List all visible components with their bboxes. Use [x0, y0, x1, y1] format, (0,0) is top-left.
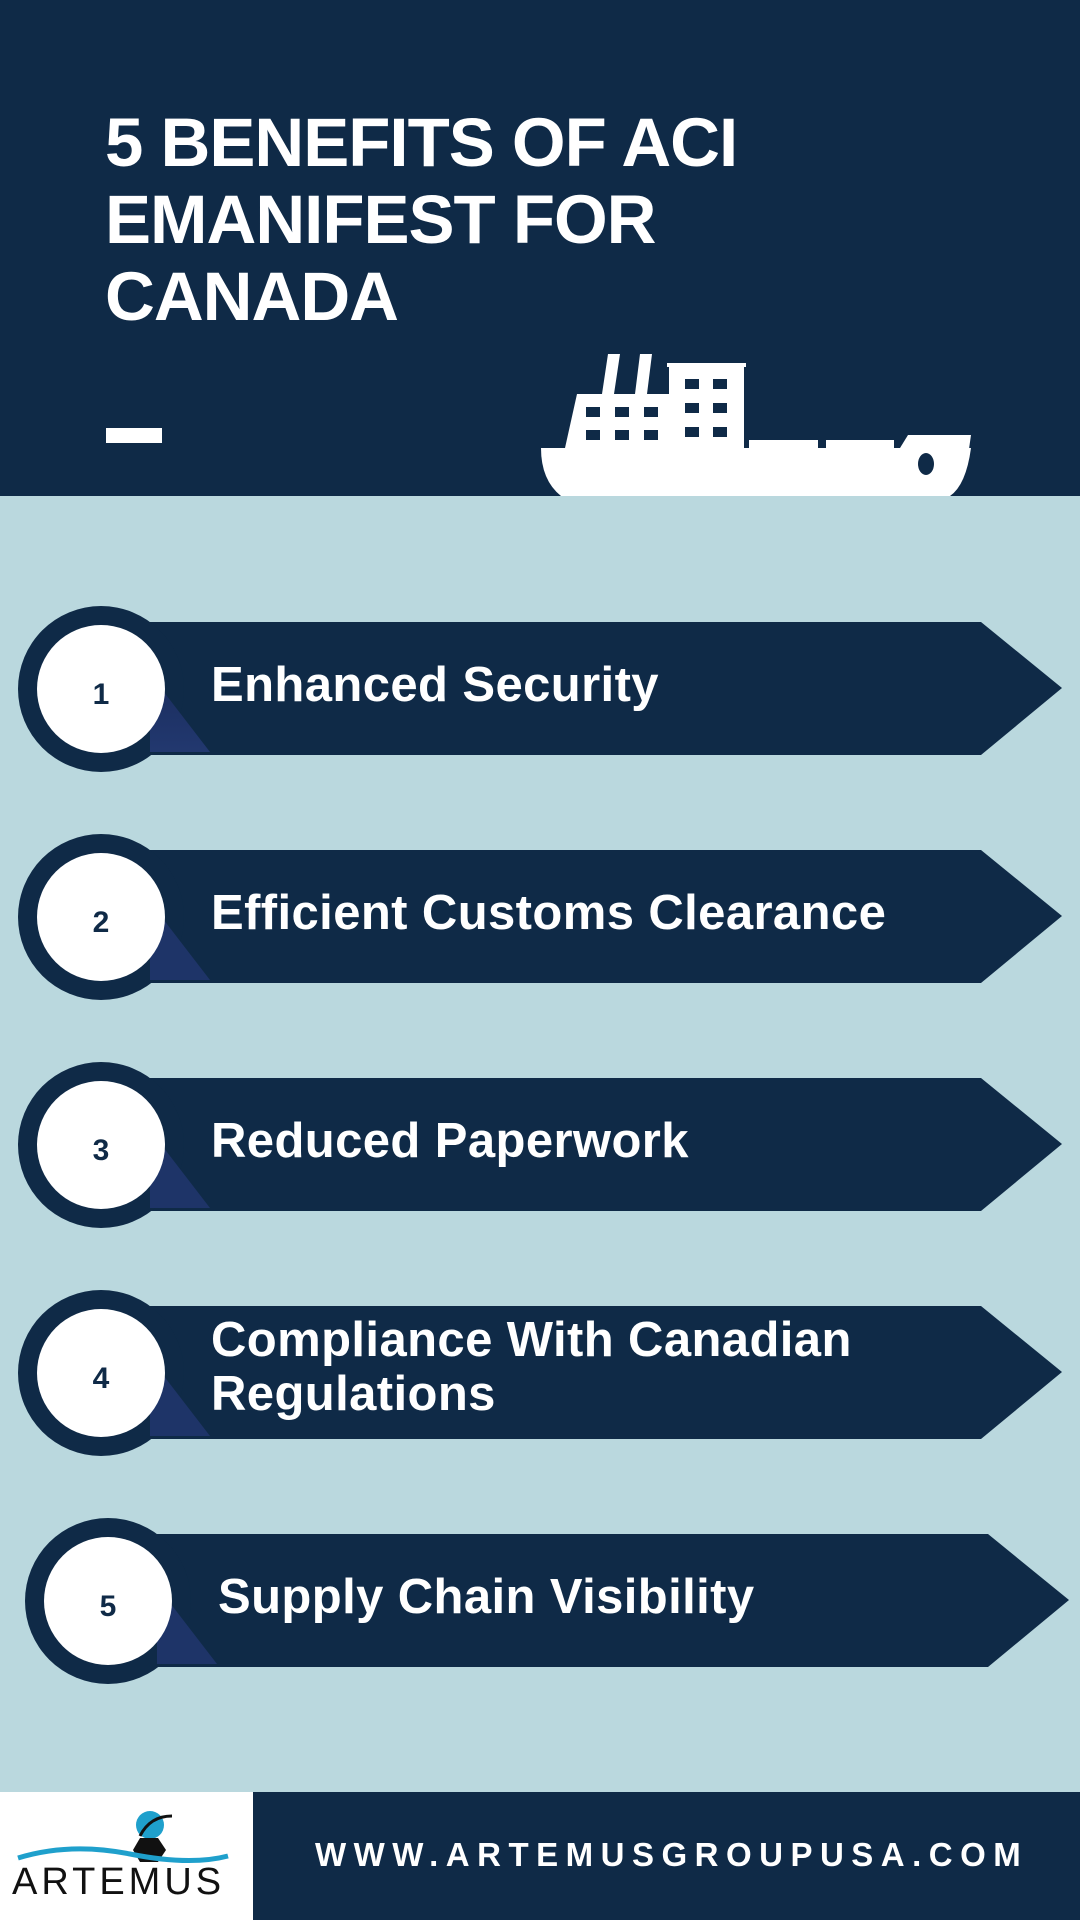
footer logo panel [0, 1792, 253, 1920]
footer url panel [253, 1792, 1080, 1920]
item 3: Reduced Paperwork [211, 1114, 689, 1168]
item 4: 4 [93, 1362, 109, 1395]
logo text: ARTEMUS [12, 1861, 225, 1903]
dash [106, 428, 162, 443]
item 1 [18, 606, 1062, 772]
item 2: Efficient Customs Clearance [211, 886, 886, 940]
url text: WWW.ARTEMUSGROUPUSA.COM [315, 1836, 1028, 1873]
icon: ship [541, 354, 971, 496]
icon: artemus logo [17, 1811, 229, 1863]
item 1: Enhanced Security [211, 658, 659, 712]
item 5 [25, 1518, 1069, 1684]
item 3: 3 [93, 1134, 109, 1167]
title: CANADA [105, 258, 398, 335]
item 5: 5 [100, 1590, 116, 1623]
item 5: Supply Chain Visibility [218, 1570, 755, 1624]
item 1: 1 [93, 678, 109, 711]
item 4: Compliance With Canadian [211, 1313, 852, 1367]
item 4 [18, 1290, 1062, 1456]
title: EMANIFEST FOR [105, 181, 656, 258]
item 4: Regulations [211, 1367, 496, 1421]
title [105, 104, 737, 335]
title: 5 BENEFITS OF ACI [105, 104, 737, 181]
item 2: 2 [93, 906, 109, 939]
item 3 [18, 1062, 1062, 1228]
header panel [0, 0, 1080, 496]
item 2 [18, 834, 1062, 1000]
